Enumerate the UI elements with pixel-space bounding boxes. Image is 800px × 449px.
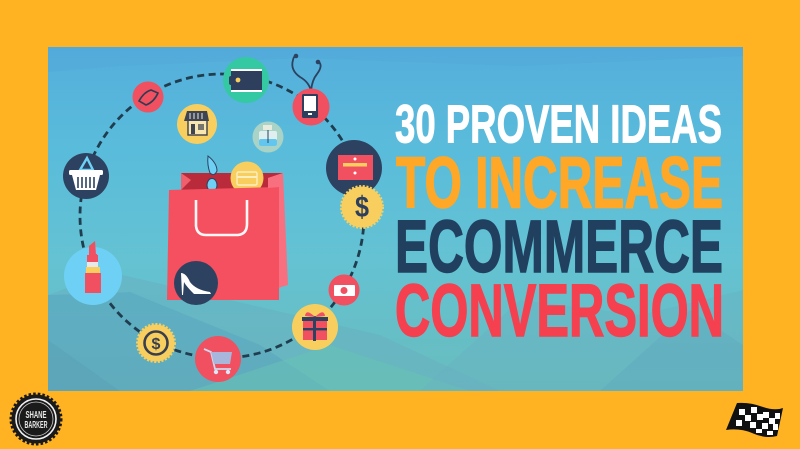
icon: credit card — [230, 162, 264, 194]
icon: gift box — [292, 304, 338, 350]
icon: lipstick — [64, 241, 122, 305]
title — [395, 94, 724, 352]
icon: shopping cart — [195, 336, 241, 382]
logo: Shane Barker badge: BARKER — [24, 419, 48, 431]
icon: coin badge: $ — [152, 336, 161, 353]
icon: shopping basket — [63, 153, 109, 199]
icon: cash bill — [328, 274, 360, 306]
logo: Shane Barker badge — [12, 394, 60, 444]
icon: drawer wallet — [326, 140, 382, 196]
icon: sunglasses in bag — [207, 156, 217, 192]
panel: hero background — [48, 47, 743, 391]
icon: dollar badge: $ — [355, 191, 369, 224]
icon: store — [177, 104, 217, 144]
icon: red tag — [132, 82, 164, 112]
icon: dollar badge — [342, 186, 382, 228]
logo: Shane Barker badge: SHANE — [26, 409, 46, 421]
icon: high heel shoe — [174, 261, 218, 305]
icon: coin badge — [138, 324, 174, 362]
icon: perfume — [252, 122, 284, 152]
icon: phone with earphones — [292, 54, 330, 126]
dashed ring — [80, 74, 364, 358]
shopping bag — [167, 156, 288, 300]
icon: wallet — [223, 57, 269, 103]
icon: checkered flag — [726, 403, 783, 437]
